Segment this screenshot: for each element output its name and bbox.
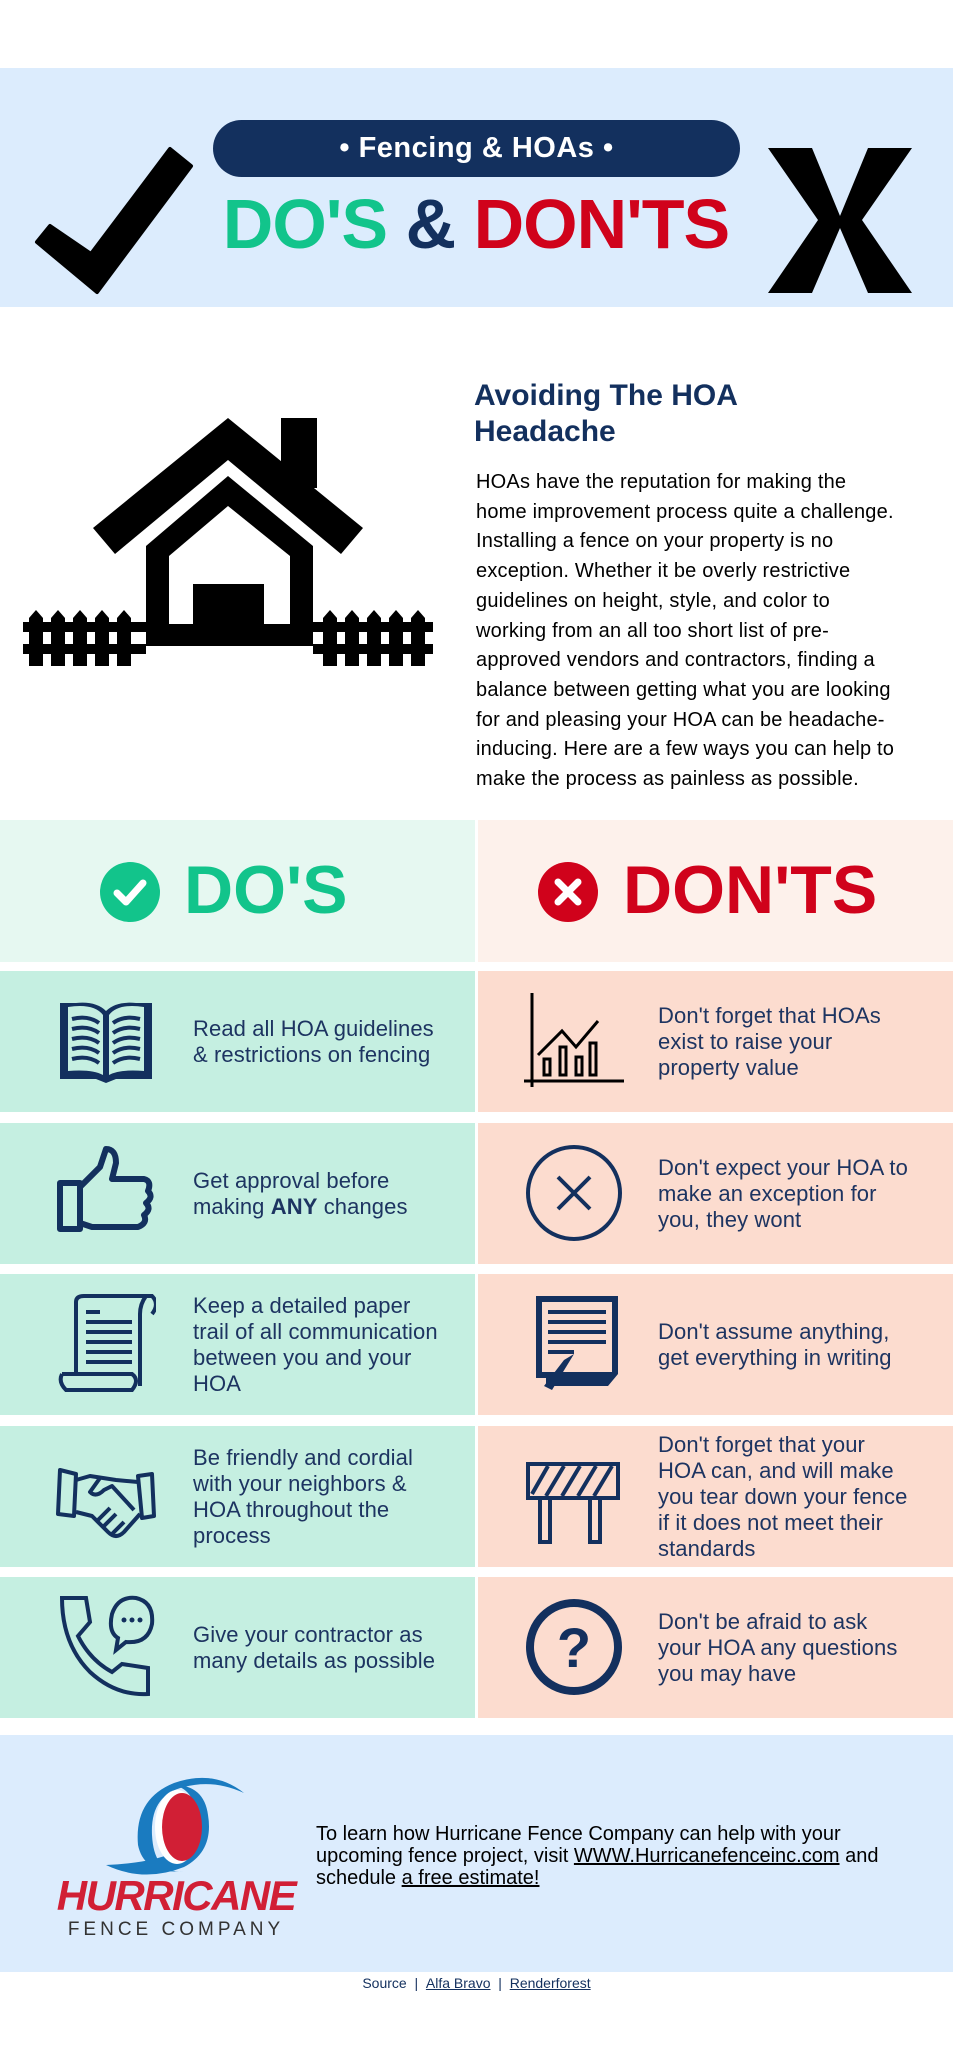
text: read guidelines: Read all HOA guidelines & restrictions on fencing — [193, 1016, 434, 1066]
icon: circle x — [526, 1145, 622, 1241]
text: get it in writing: Don't assume anything, get everything in writing — [658, 1318, 892, 1370]
heading: DON'TS: DON'TS — [623, 852, 877, 928]
row 4 — [0, 1426, 953, 1567]
text: no exceptions: Don't expect your HOA to make an exception for you, they wont — [658, 1154, 908, 1232]
title: DO'S & DON'TS: DO'S & DON'TS — [223, 185, 729, 263]
source line: Source | Alfa Bravo | Renderforest — [362, 1975, 591, 1991]
icon: barrier — [526, 1462, 620, 1544]
icon: house with fence — [23, 418, 433, 666]
header band — [0, 68, 953, 307]
text: ask questions: Don't be afraid to ask your HOA any questions you may have — [658, 1608, 897, 1686]
icon: green check circle — [100, 862, 160, 922]
row 1 — [0, 971, 953, 1112]
icon: thumbs up — [57, 1146, 154, 1232]
pill: Fencing & HOAs: • Fencing & HOAs • — [339, 132, 614, 164]
text: tear down: Don't forget that your HOA can, and will make you tear down your fence if it does not meet their standards — [658, 1432, 907, 1560]
heading: Avoiding The HOA Headache — [474, 379, 738, 448]
row 5 — [0, 1577, 953, 1718]
icon: document with pen — [536, 1296, 618, 1390]
icon: question circle: ? — [557, 1616, 591, 1679]
panel: DO'S header — [0, 820, 475, 962]
heading: DO'S: DO'S — [184, 852, 348, 928]
icon: red x circle — [538, 862, 598, 922]
logo: Hurricane Fence Company: FENCE COMPANY — [68, 1919, 284, 1940]
text: give details: Give your contractor as many details as possible — [193, 1622, 435, 1672]
panel: DON'TS header — [478, 820, 953, 962]
text: property value: Don't forget that HOAs exist to raise your property value — [658, 1002, 881, 1080]
text: call to action: To learn how Hurricane Fence Company can help with your upcoming fence project, visit WWW.Hurricanefenceinc.com and schedule a free estimate! — [316, 1823, 878, 1889]
text: get approval: Get approval before making ANY changes — [193, 1168, 408, 1218]
icon: question circle — [526, 1599, 622, 1695]
icon: big X — [768, 148, 912, 293]
logo: Hurricane Fence Company — [57, 1778, 298, 1940]
icon: phone with chat bubble — [60, 1596, 154, 1696]
heading: Avoiding The HOA Headache: Headache — [474, 415, 616, 448]
pill: Fencing & HOAs — [213, 120, 740, 177]
text: be friendly: Be friendly and cordial with your neighbors & HOA throughout the process — [193, 1444, 413, 1548]
icon: handshake — [56, 1468, 156, 1538]
icon: chart — [524, 993, 624, 1087]
text: paper trail: Keep a detailed paper trail of all communication between you and your HOA — [193, 1292, 438, 1396]
icon: big check mark — [34, 146, 194, 294]
intro paragraph: HOAs have the reputation for making the home improvement process quite a challenge. Installing a fence on your property is no exception. Whether it be overly restrictive guidelines on height, style, and color to working from an all too short list of pre-approved vendors and contractors, finding a balance between getting what you are looking for and pleasing your HOA can be headache-inducing. Here are a few ways you can help to make the process as painless as possible. — [476, 471, 894, 790]
heading: Avoiding The HOA Headache: Avoiding The HOA — [474, 379, 738, 412]
row 2 — [0, 1123, 953, 1264]
logo: Hurricane Fence Company: HURRICANE — [57, 1872, 295, 1919]
icon: book — [60, 1002, 152, 1083]
icon: scroll — [58, 1294, 156, 1392]
footer band — [0, 1735, 953, 1972]
row 3 — [0, 1274, 953, 1415]
